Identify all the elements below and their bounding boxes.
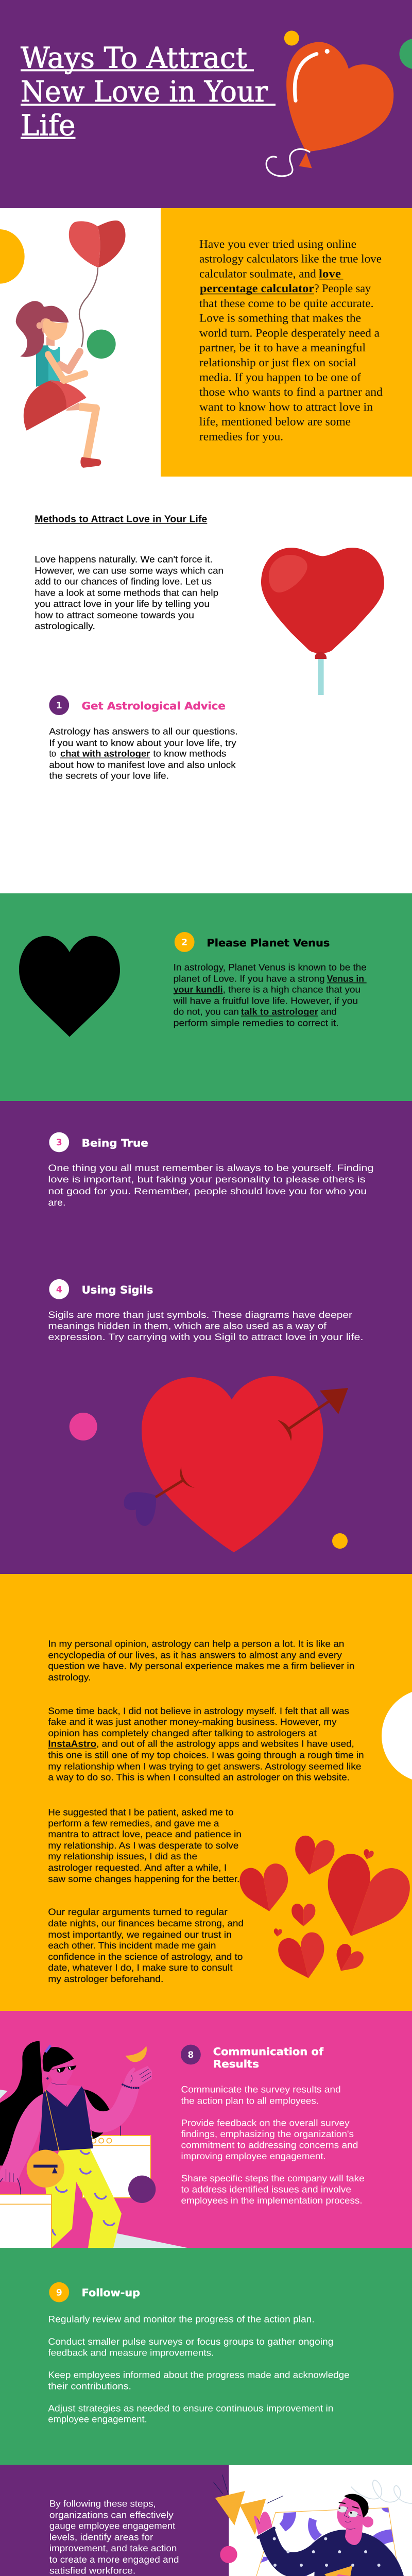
text: intro paragraph: Love is something that makes the — [199, 312, 361, 325]
text: venus body: In astrology, Planet Venus is known to be the — [174, 962, 367, 973]
number badge 3: 3 — [56, 1138, 62, 1148]
number badge 9 — [49, 2282, 69, 2302]
heading: please planet venus: Please Planet Venus — [207, 937, 330, 949]
title — [21, 41, 276, 142]
text: methods intro: you attract love in your life by telling you — [35, 599, 210, 609]
text: conclusion: organizations can effectively — [49, 2510, 174, 2520]
panel: header — [0, 0, 412, 208]
number badge 4: 4 — [56, 1285, 62, 1295]
text: follow-up body: Conduct smaller pulse surveys or focus groups to gather ongoing — [48, 2336, 333, 2347]
number badge 8: 8 — [187, 2050, 194, 2060]
text: opinion paragraph 1: question we have. My personal experience makes me a firm believer in — [48, 1661, 354, 1671]
text: opinion paragraph 4 — [48, 1907, 244, 1984]
text: opinion paragraph 3: perform a few remedies, and gave me a — [48, 1818, 220, 1828]
text: step 1 body: chat with astrologer — [60, 749, 150, 759]
text: opinion paragraph 1: astrology. — [48, 1672, 91, 1683]
step 1 — [49, 695, 238, 781]
text: opinion paragraph 2: this one is still one of my top choices. I was going through a rough time in — [48, 1750, 364, 1760]
text: opinion paragraph 2: my relationship when I was trying to get answers. Astrology seemed like — [48, 1761, 361, 1771]
text: step 1 body: the secrets of your love life. — [49, 771, 169, 781]
text: communication body: employees in the implementation process. — [181, 2195, 363, 2206]
illustration: woman with windows — [0, 2041, 188, 2249]
text: follow-up body — [48, 2314, 350, 2425]
text: opinion paragraph 3: my relationship issues, I did as the — [48, 1851, 197, 1861]
heading: get astrological advice: Get Astrological Advice — [82, 700, 226, 712]
text: follow-up body: Regularly review and monitor the progress of the action plan. — [48, 2314, 315, 2325]
title: Ways To Attract — [21, 41, 247, 75]
icon: yellow dot — [284, 31, 299, 45]
text: intro paragraph: Have you ever tried using online — [199, 238, 356, 250]
heading: using sigils: Using Sigils — [82, 1284, 153, 1296]
icon: red balloon — [261, 548, 384, 695]
text: communication body: to address identified issues and involve — [181, 2184, 351, 2194]
panel: intro — [0, 208, 412, 477]
text: intro paragraph: remedies for you. — [199, 430, 283, 443]
text: being true body: are. — [48, 1197, 66, 1208]
text: communication body: Share specific steps the company will take — [181, 2173, 365, 2183]
heading: methods: Methods to Attract Love in Your Life — [35, 514, 207, 524]
illustration: cluster of hearts — [237, 1834, 412, 1984]
text: intro paragraph: astrology calculators like the true love — [199, 252, 382, 265]
illustration: girl with balloon — [0, 221, 126, 468]
illustration: man with triangles — [213, 2475, 412, 2576]
text: step 1 body: about how to manifest love and also unlock — [49, 760, 236, 770]
text: step 1 body: Astrology has answers to all our questions. — [49, 726, 238, 736]
decoration: white circle — [382, 1689, 412, 1783]
text: sigils body — [48, 1310, 364, 1342]
text: communication body: the action plan to all employees. — [181, 2096, 319, 2106]
text: step 1 body: If you want to know about your love life, try — [49, 738, 236, 748]
text: opinion paragraph 3: He suggested that I be patient, asked me to — [48, 1807, 234, 1817]
text: methods intro: add to our chances of finding love. Let us — [35, 576, 212, 586]
title: Life — [21, 109, 75, 142]
icon: green dot — [400, 39, 412, 69]
text: venus body: your kundli — [174, 984, 223, 994]
number badge 2 — [175, 932, 195, 952]
text: venus body: do not, you can — [174, 1007, 239, 1017]
text: step 1 body: to know methods — [153, 749, 226, 759]
panel: follow-up — [0, 2248, 412, 2465]
text: methods intro: However, we can use some ways which can — [35, 566, 224, 576]
panel: personal opinion — [0, 1574, 412, 2011]
panel: methods — [35, 514, 384, 781]
text: step 1 body: to — [49, 749, 56, 759]
text: being true body: love is important, but faking your personality to please others is — [48, 1174, 366, 1184]
text: intro paragraph: calculator soulmate, and — [199, 267, 316, 280]
text: opinion paragraph 2: opinion has completely changed after talking to astrologers at — [48, 1728, 317, 1738]
number badge 1 — [49, 695, 69, 715]
text: venus body — [173, 962, 367, 1028]
panel: communication of results — [0, 2011, 412, 2249]
text: venus body: Venus in — [327, 973, 364, 984]
text: intro paragraph: media. If you happen to be one of — [199, 371, 362, 383]
text: conclusion: gauge employee engagement — [49, 2521, 175, 2531]
text: methods intro: have a look at some methods that can help — [35, 587, 218, 598]
text: communication body: improving employee engagement. — [181, 2151, 326, 2161]
text: conclusion: By following these steps, — [49, 2499, 156, 2509]
text: intro paragraph: relationship or just flex on social — [199, 356, 356, 369]
number badge 4 — [49, 1279, 69, 1299]
text: opinion paragraph 4: most importantly, we regained our trust in — [48, 1929, 232, 1940]
title: New Love in Your — [21, 75, 268, 109]
text: follow-up body: employee engagement. — [48, 2414, 147, 2425]
text: venus body: perform simple remedies to correct it. — [174, 1018, 339, 1028]
text: opinion paragraph 2: , and out of all the astrology apps and websites I have used, — [96, 1739, 354, 1749]
text: communication body: Communicate the survey results and — [181, 2084, 341, 2095]
text: opinion paragraph 4: date, whatever I do, I make sure to consult — [48, 1962, 233, 1973]
text: sigils body: Sigils are more than just symbols. These diagrams have deeper — [48, 1310, 352, 1320]
text: opinion paragraph 4: my astrologer beforehand. — [48, 1974, 163, 1984]
number badge 3 — [49, 1132, 69, 1152]
text: opinion paragraph 1: In my personal opinion, astrology can help a person a lot. It is like an — [48, 1639, 344, 1649]
heading: communication of results: Communication of — [213, 2045, 323, 2058]
text: intro paragraph: those who wants to find a partner and — [199, 385, 383, 398]
text: step 1 body — [49, 726, 238, 781]
text: conclusion: to create a more engaged and — [49, 2554, 179, 2565]
text: being true body — [48, 1163, 373, 1208]
text: opinion paragraph 3: my relationship. As I was desperate to solve — [48, 1840, 238, 1851]
text: opinion paragraph 2 — [48, 1706, 364, 1782]
text: intro paragraph: world turn. People desperately need a — [199, 326, 380, 339]
heading: follow-up: Follow-up — [82, 2286, 140, 2299]
text: communication body — [181, 2084, 365, 2206]
text: intro paragraph: love — [319, 267, 341, 280]
text: intro paragraph: want to know how to attract love in — [199, 400, 373, 413]
text: conclusion — [49, 2499, 179, 2575]
text: opinion paragraph 3 — [48, 1807, 242, 1884]
number badge 1: 1 — [56, 701, 62, 711]
text: follow-up body: their contributions. — [48, 2381, 131, 2391]
text: methods intro — [35, 554, 224, 631]
icon: orange heart balloon — [266, 42, 393, 176]
text: communication body: commitment to addressing concerns and — [181, 2140, 358, 2150]
text: intro paragraph: that these come to be quite accurate. — [199, 297, 374, 310]
text: opinion paragraph 2: fake and it was just another money-making business. However, my — [48, 1717, 337, 1727]
text: venus body: will have a fruitful love life. However, if you — [173, 995, 358, 1006]
text: opinion paragraph 2: a way to do so. This is when I consulted an astrologer on this website. — [48, 1772, 350, 1782]
text: opinion paragraph 4: confidence in the science of astrology, and to — [48, 1952, 243, 1962]
number badge 2: 2 — [181, 938, 187, 948]
text: methods intro: Love happens naturally. We can't force it. — [35, 554, 213, 565]
icon: black heart — [19, 936, 120, 1037]
heading: being true: Being True — [82, 1137, 148, 1149]
text: intro paragraph: life, mentioned below are some — [199, 415, 351, 428]
text: methods intro: astrologically. — [35, 621, 95, 631]
number badge 9: 9 — [56, 2287, 62, 2298]
text: opinion paragraph 3: astrologer requested. And after a while, I — [48, 1862, 227, 1873]
text: intro paragraph: partner, be it to have a meaningful — [199, 341, 366, 354]
text: opinion paragraph 3: mantra to attract love, peace and patience in — [48, 1829, 242, 1839]
text: follow-up body: feedback and measure improvements. — [48, 2347, 214, 2358]
text: communication body: Provide feedback on the overall survey — [181, 2117, 350, 2128]
text: opinion paragraph 1 — [48, 1639, 354, 1683]
text: opinion paragraph 3: saw some changes happening for the better. — [48, 1874, 239, 1884]
text: being true body: One thing you all must remember is always to be yourself. Finding — [48, 1163, 373, 1173]
text: conclusion: improvement, and take action — [49, 2543, 177, 2553]
text: opinion paragraph 1: encyclopedia of our lives, as it has answers to almost any and every — [48, 1650, 342, 1660]
text: venus body: and — [321, 1007, 337, 1017]
text: venus body: planet of Love. If you have a strong — [174, 973, 325, 984]
text: communication body: findings, emphasizing the organization's — [181, 2129, 354, 2139]
text: venus body: talk to astrologer — [241, 1007, 318, 1017]
panel: being true and sigils — [0, 1101, 412, 1574]
heading: communication of results: Results — [213, 2058, 259, 2070]
text: sigils body: expression. Try carrying with you Sigil to attract love in your life. — [48, 1332, 364, 1342]
text: intro paragraph: percentage calculator — [200, 282, 314, 295]
text: opinion paragraph 2: InstaAstro — [48, 1739, 96, 1749]
text: follow-up body: Adjust strategies as needed to ensure continuous improvement in — [48, 2403, 333, 2413]
text: opinion paragraph 4: date nights, our finances became strong, and — [48, 1918, 244, 1928]
text: intro paragraph: ? People say — [314, 282, 371, 295]
text: methods intro: how to attract someone towards you — [35, 610, 194, 620]
text: follow-up body: Keep employees informed about the progress made and acknowledge — [48, 2369, 350, 2380]
text: opinion paragraph 2: Some time back, I did not believe in astrology myself. I felt that all was — [48, 1706, 349, 1716]
number badge 8 — [181, 2045, 201, 2064]
text: venus body: , there is a high chance that you — [223, 984, 360, 994]
text: being true body: not good for you. Remember, people should love you for who you — [48, 1186, 367, 1196]
panel: conclusion — [0, 2465, 412, 2576]
heading: communication of results — [213, 2045, 323, 2070]
text: sigils body: meanings hidden in them, which are also used as a way of — [48, 1320, 327, 1331]
text: conclusion: satisfied workforce. — [49, 2565, 135, 2575]
illustration: heart with arrow — [70, 1376, 348, 1552]
text: opinion paragraph 4: each other. This incident made me gain — [48, 1940, 216, 1951]
panel: venus — [0, 893, 412, 1101]
text: opinion paragraph 4: Our regular arguments turned to regular — [48, 1907, 228, 1917]
text: intro paragraph — [199, 238, 383, 443]
text: conclusion: levels, identify areas for — [49, 2532, 153, 2542]
